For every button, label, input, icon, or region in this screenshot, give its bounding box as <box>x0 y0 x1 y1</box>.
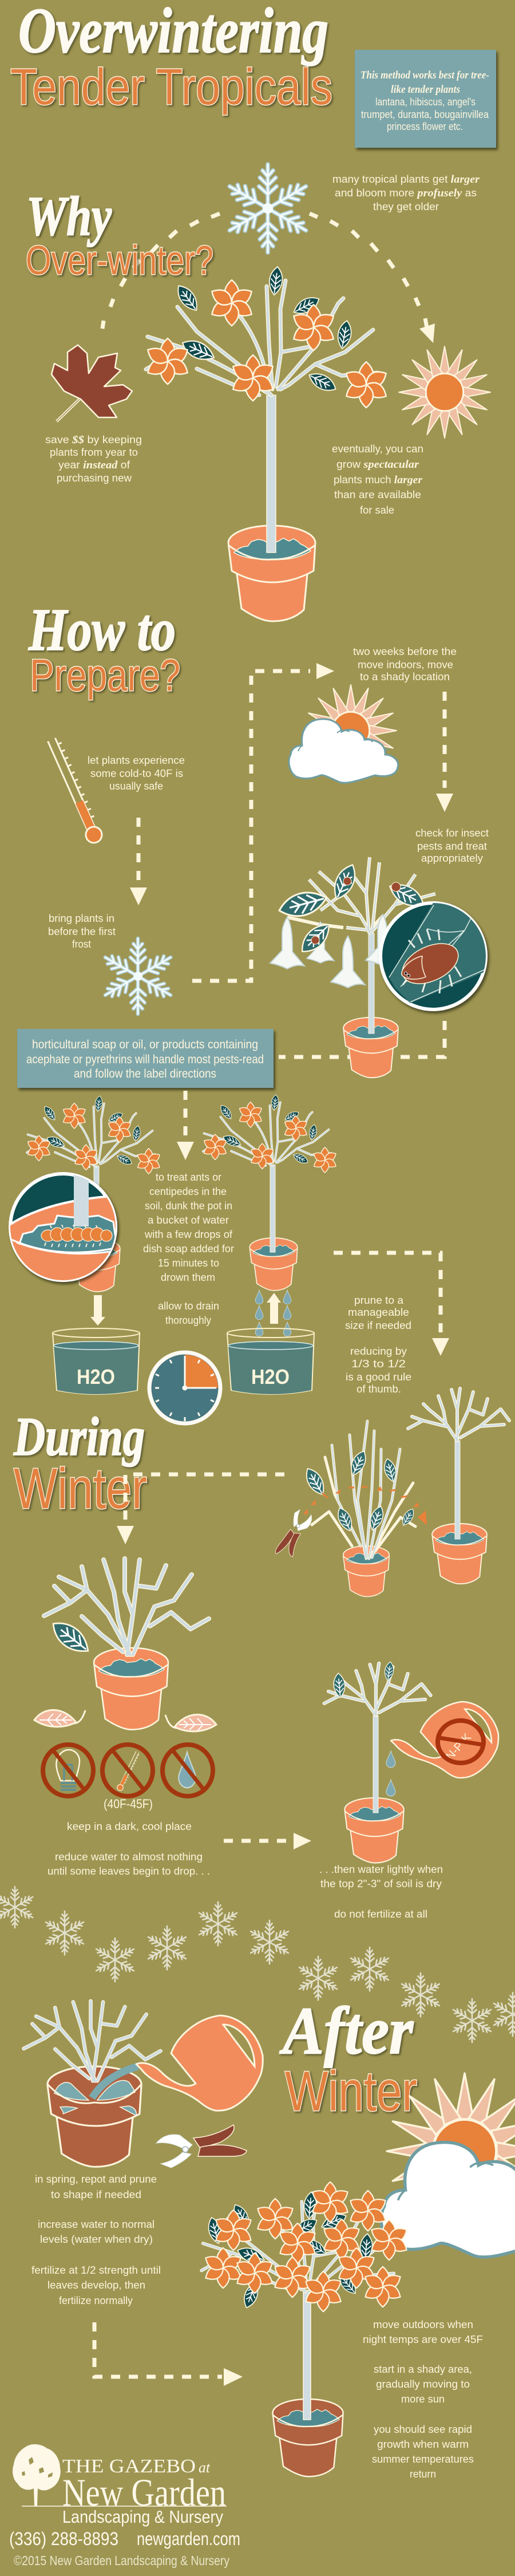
arrow: to winter storage <box>117 1474 284 1544</box>
text: prune: reducing by <box>350 1346 407 1357</box>
icon: pruners <box>268 1506 320 1563</box>
logo: The Gazebo at New Garden: THE GAZEBO <box>62 2456 196 2477</box>
icon: fallen leaves <box>34 1710 216 1731</box>
icon: water drops <box>255 1290 291 1336</box>
text: winter care: until some leaves begin to drop. . . <box>47 1865 210 1877</box>
icon: watering can no fertilizer <box>391 1702 498 1778</box>
icon: no warmth <box>102 1745 153 1796</box>
logo: The Gazebo at New Garden: Landscaping & Nursery <box>62 2507 223 2527</box>
text: spectacular plants: plants much larger <box>334 474 423 486</box>
panel: plant types note: like tender plants <box>391 84 460 96</box>
heading: how to prepare: Prepare? <box>30 650 180 700</box>
text: move outdoors: more sun <box>401 2393 445 2405</box>
text: prune: 1/3 to 1/2 <box>351 1358 406 1370</box>
text: treat ants or centipedes <box>143 1171 234 1326</box>
heading: how to prepare <box>28 596 180 700</box>
text: treat ants or centipedes: dish soap added for <box>143 1243 234 1255</box>
panel: horticultural soap note: horticultural soap or oil, or products containing <box>32 1038 258 1051</box>
text: larger plants: many tropical plants get larger <box>332 173 480 186</box>
arrow: shade to pest check <box>436 692 453 812</box>
text: save money: plants from year to <box>50 447 138 458</box>
icon: thermometer <box>44 736 104 845</box>
text: cold exposure <box>88 755 185 792</box>
logo: The Gazebo at New Garden: at <box>199 2459 211 2476</box>
illustration: tree draining <box>202 1094 338 1291</box>
text: water lightly: . . .then water lightly when <box>319 1864 443 1875</box>
text: bring plants in <box>48 913 116 950</box>
text: move outdoors: gradually moving to <box>376 2378 470 2390</box>
icon: no water <box>163 1745 213 1796</box>
text: winter care: keep in a dark, cool place <box>67 1821 192 1832</box>
text: treat ants or centipedes: centipedes in the <box>149 1186 227 1197</box>
arrow: lift from bucket <box>267 1293 281 1324</box>
text: water lightly <box>319 1864 443 1920</box>
arrow: pest tree to soap note <box>279 1021 445 1057</box>
heading: after winter: After <box>279 1993 414 2068</box>
text: move outdoors: start in a shady area, <box>374 2364 472 2375</box>
text: prune: of thumb. <box>356 1383 401 1395</box>
panel: plant types note: princess flower etc. <box>387 121 463 132</box>
text: treat ants or centipedes: allow to drain <box>158 1300 219 1312</box>
heading: why over-winter <box>26 186 213 283</box>
panel: plant types note <box>355 50 496 148</box>
logo: The Gazebo at New Garden: New Garden <box>62 2471 226 2514</box>
arrow: to pruning <box>334 1253 449 1356</box>
arrow: soap note to treatment <box>177 1091 194 1160</box>
text: move outdoors: growth when warm <box>377 2439 469 2450</box>
text: move outdoors: return <box>410 2468 436 2480</box>
text: spectacular plants: grow spectacular <box>336 459 419 471</box>
text: two weeks before <box>353 646 457 683</box>
text: spring care: levels (water when dry) <box>40 2234 153 2245</box>
text: save money: year instead of <box>58 459 130 471</box>
text: bring plants in: before the first <box>48 926 116 937</box>
text: treat ants or centipedes: thoroughly <box>165 1315 211 1326</box>
text: two weeks before: to a shady location <box>360 671 450 683</box>
illustration: winter plant in pot <box>44 1559 209 1730</box>
illustration: pruned tree right <box>408 1388 509 1584</box>
text: prune: size if needed <box>345 1320 411 1331</box>
magnifier: centipede in soil <box>9 1174 120 1283</box>
text: save money <box>45 434 142 484</box>
arrow: dunk into bucket <box>90 1295 105 1326</box>
text: move outdoors: you should see rapid <box>374 2424 472 2435</box>
icon: sun <box>399 346 490 438</box>
dashed arc arrow: why over-winter <box>102 214 435 343</box>
icon: no light <box>43 1745 93 1796</box>
heading: during winter: Winter <box>14 1457 147 1521</box>
text: treat ants or centipedes: to treat ants or <box>156 1171 221 1183</box>
text: bring plants in: frost <box>72 938 91 950</box>
text: spring care: increase water to normal <box>38 2219 154 2230</box>
arrow: cold to frost <box>130 818 147 905</box>
text: two weeks before: move indoors, move <box>358 659 453 670</box>
panel: plant types note: trumpet, duranta, bougainvillea <box>361 109 489 120</box>
panel: horticultural soap note: and follow the label directions <box>74 1067 216 1080</box>
arrow: frost to shady location <box>192 663 334 981</box>
text: check for pests: pests and treat <box>417 841 487 852</box>
text: save money: purchasing new <box>57 472 132 484</box>
logo: The Gazebo at New Garden <box>13 2444 227 2527</box>
text: move outdoors: move outdoors when <box>373 2319 473 2330</box>
illustration: repotting plant <box>23 2001 161 2167</box>
illustration: full tree in bloom <box>201 2182 410 2476</box>
heading: why over-winter: Over-winter? <box>26 238 213 283</box>
text: winter care: (40F-45F) <box>104 1797 153 1811</box>
illustration: large flowering tree in pot <box>144 266 390 621</box>
text: larger plants <box>332 173 480 212</box>
contact line: (336) 288-8893 <box>9 2528 118 2549</box>
text: two weeks before: two weeks before the <box>353 646 457 657</box>
text: larger plants: they get older <box>373 201 439 212</box>
text: prune: is a good rule <box>346 1371 411 1383</box>
icon: large snowflake <box>225 164 310 253</box>
icon: drops from can <box>386 1751 395 1796</box>
bucket of water right: H2O <box>251 1365 290 1388</box>
text: check for pests: appropriately <box>421 853 483 864</box>
text: winter care: reduce water to almost nothing <box>55 1851 203 1863</box>
text: prune: manageable <box>348 1307 409 1318</box>
illustration: lightly watered tree <box>324 1661 431 1863</box>
arrow: to outdoor tree <box>94 2322 243 2386</box>
text: cold exposure: some cold-to 40F is <box>90 768 183 779</box>
icon: snowflake frost <box>101 938 175 1014</box>
text: check for pests: check for insect <box>415 827 489 839</box>
text: move outdoors: summer temperatures <box>372 2453 474 2465</box>
text: move outdoors: night temps are over 45F <box>363 2334 483 2345</box>
arrow: to light watering <box>224 1833 311 1849</box>
panel: plant types note: lantana, hibiscus, angel's <box>375 96 476 108</box>
panel: plant types note: This method works best for tree- <box>360 69 489 81</box>
illustration: tree being pruned <box>302 1421 427 1597</box>
illustration: angel's trumpet with pests <box>270 857 435 1078</box>
text: treat ants or centipedes: drown them <box>161 1272 215 1283</box>
icon: clock 15 minutes <box>149 1352 220 1423</box>
text: spectacular plants: eventually, you can <box>332 443 423 455</box>
text: spectacular plants <box>332 443 423 516</box>
text: winter care <box>47 1797 210 1877</box>
text: treat ants or centipedes: with a few drops of <box>144 1229 233 1240</box>
text: spectacular plants: than are available <box>334 489 421 500</box>
bucket of water right <box>227 1328 314 1394</box>
text: check for pests <box>415 827 489 864</box>
text: spectacular plants: for sale <box>360 504 394 516</box>
contact line: newgarden.com <box>137 2528 240 2549</box>
text: water lightly: do not fertilize at all <box>334 1908 427 1920</box>
illustration: tree with soil pests <box>26 1095 161 1292</box>
heading: after winter: Winter <box>285 2060 417 2123</box>
text: move outdoors <box>363 2319 483 2480</box>
heading: during winter <box>13 1406 147 1521</box>
text: spring care <box>31 2173 161 2306</box>
copyright: ©2015 New Garden Landscaping & Nursery <box>14 2553 229 2568</box>
text: treat ants or centipedes: soil, dunk the pot in <box>145 1200 232 1212</box>
icon: watering can <box>136 2015 263 2110</box>
text: spring care: fertilize at 1/2 strength until <box>31 2265 161 2276</box>
title <box>10 0 332 115</box>
heading: during winter: During <box>13 1406 145 1467</box>
heading: how to prepare: How to <box>28 596 176 663</box>
magnifier: leaf mite <box>381 902 492 1009</box>
text: prune <box>345 1295 411 1395</box>
text: spring care: fertilize normally <box>59 2295 133 2306</box>
text: bring plants in: bring plants in <box>49 913 114 924</box>
bucket of water left <box>53 1328 140 1394</box>
bucket of water left: H2O <box>77 1365 115 1388</box>
icon: maple leaf <box>52 345 132 421</box>
decorative snowfall <box>0 1887 515 2042</box>
icon: pruners large <box>156 2125 247 2168</box>
heading: why over-winter: Why <box>26 186 112 247</box>
text: spring care: leaves develop, then <box>47 2279 145 2291</box>
text: spring care: in spring, repot and prune <box>35 2173 157 2185</box>
text: larger plants: and bloom more profusely as <box>335 187 477 199</box>
text: water lightly: the top 2"-3" of soil is dry <box>320 1878 442 1889</box>
panel: horticultural soap note: acephate or pyrethrins will handle most pests-read <box>26 1053 264 1066</box>
heading: after winter <box>279 1993 417 2123</box>
text: cold exposure: let plants experience <box>88 755 185 766</box>
contact line <box>9 2528 240 2549</box>
text: spring care: to shape if needed <box>51 2189 141 2200</box>
icon: sun and large cloud <box>381 2073 515 2257</box>
panel: horticultural soap note <box>17 1029 274 1088</box>
icon: sun behind cloud <box>289 685 398 783</box>
title: Tender Tropicals <box>10 58 332 115</box>
icon: watering can no fertilizer: N-P-K <box>443 1731 474 1763</box>
text: treat ants or centipedes: 15 minutes to <box>158 1257 219 1269</box>
text: prune: prune to a <box>354 1295 404 1306</box>
text: cold exposure: usually safe <box>109 780 163 792</box>
text: treat ants or centipedes: a bucket of water <box>148 1214 229 1226</box>
text: save money: save $$ by keeping <box>45 434 142 446</box>
